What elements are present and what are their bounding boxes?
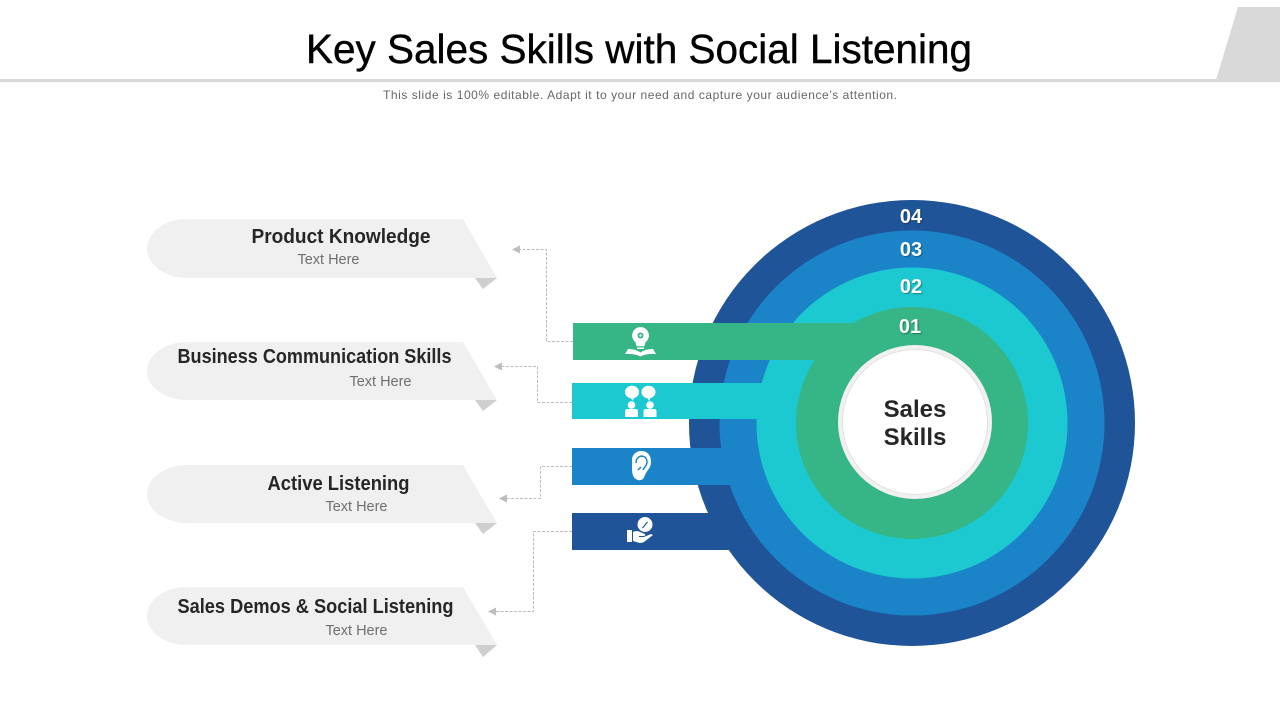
ring 01: [796, 307, 1028, 539]
number 01: 01: [899, 316, 921, 338]
icon: two people with speech bubbles: [625, 386, 656, 417]
ring 03: [720, 230, 1104, 616]
body text: Text Here: [298, 252, 360, 268]
ribbon: Business Communication Skills: [147, 342, 497, 411]
center label: Skills: [884, 424, 946, 451]
body text: Text Here: [326, 499, 388, 515]
ribbon: Active Listening: [147, 465, 497, 534]
icon: light bulb over open book: [625, 327, 656, 356]
body text: Text Here: [350, 374, 412, 390]
center label: Sales: [884, 396, 946, 423]
subtitle: This slide is 100% editable. Adapt it to your need and capture your audience’s attention.: [383, 88, 897, 102]
heading: Product Knowledge: [252, 226, 430, 248]
heading: Business Communication Skills: [178, 346, 452, 368]
arrow: bar 03 to Active Listening: [499, 466, 572, 502]
ring 04: [689, 200, 1135, 646]
bar 03: [572, 448, 732, 485]
number 04: 04: [900, 206, 923, 228]
heading: Active Listening: [268, 473, 410, 495]
arrow: bar 01 to Product Knowledge: [512, 246, 573, 342]
icon: ear: [632, 451, 651, 480]
center circle: [838, 345, 992, 499]
body text: Text Here: [326, 623, 388, 639]
heading: Sales Demos & Social Listening: [178, 596, 454, 618]
arrow: bar 04 to Sales Demos: [488, 532, 572, 616]
ribbon: Sales Demos & Social Listening: [147, 587, 497, 657]
bar 02: [572, 383, 772, 419]
ring 02: [756, 268, 1068, 578]
title: Key Sales Skills with Social Listening: [306, 26, 972, 72]
ribbon: Product Knowledge: [147, 219, 497, 289]
bar 04: [572, 513, 737, 550]
header rule and corner shape: [0, 7, 1280, 82]
number 03: 03: [900, 239, 922, 261]
bar 01: [573, 323, 855, 360]
concentric ring chart: [572, 200, 1135, 646]
number 02: 02: [900, 276, 922, 298]
arrow: bar 02 to Business Communication Skills: [494, 362, 572, 402]
icon: hand holding discount badge: [627, 517, 653, 543]
